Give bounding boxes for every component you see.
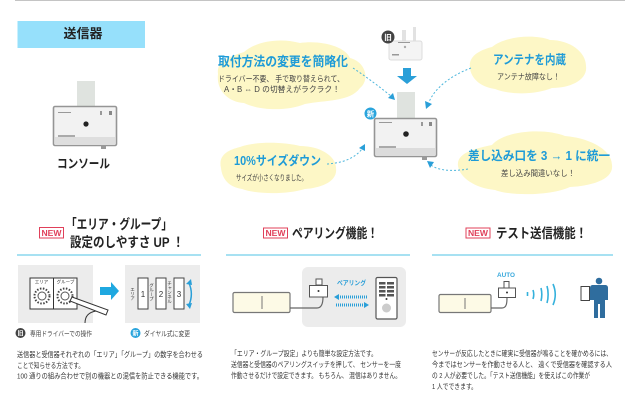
- console product photo: [54, 81, 116, 149]
- section: area group settings: [16, 216, 203, 380]
- description: の 2 人が必要でした。「テスト送信機能」を使えばこの作業が: [432, 371, 590, 380]
- section: test transmission: [432, 225, 613, 391]
- legend: old method: 旧: [17, 330, 24, 338]
- callout: 取付方法の変更を簡略化: A・B ⇔ D の切替えがラクラク！: [224, 84, 340, 94]
- arrow: connector callout to device: [427, 161, 468, 170]
- illustration: new dial: チャンネル: [167, 281, 172, 304]
- illustration: old driver dial: [18, 265, 108, 323]
- callout: 10%サイズダウン: 10%サイズダウン: [234, 153, 321, 168]
- description: 今まではセンサーを作動させる人と、 遠くで受信器を確認する人: [432, 360, 612, 369]
- arrow: change: [100, 282, 119, 300]
- illustration: new dial: 1: [141, 290, 146, 299]
- new badge: NEW: [42, 228, 62, 238]
- new transmitter photo: [364, 92, 436, 160]
- callout: アンテナを内蔵: [470, 37, 586, 93]
- illustration: new dial: [125, 265, 200, 323]
- section heading: テスト送信機能！: [496, 225, 587, 241]
- callout: 取付方法の変更を簡略化: 取付方法の変更を簡略化: [218, 54, 348, 69]
- callout: アンテナを内蔵: アンテナ故障なし！: [497, 72, 560, 82]
- legend: new method: [130, 328, 190, 338]
- description: [231, 349, 401, 380]
- callout: アンテナを内蔵: アンテナを内蔵: [493, 52, 566, 67]
- new badge: NEW: [266, 228, 286, 238]
- illustration: new dial: 2: [159, 290, 164, 299]
- description: [17, 350, 203, 380]
- heading: 送信器: [18, 21, 145, 48]
- description: 作動させるだけで設定できます。 もちろん、 混信はありません。: [231, 371, 401, 380]
- illustration: new dial: エリア: [130, 287, 136, 301]
- callout: 取付方法の変更を簡略化: ドライバー不要、 手で取り替えられて、: [218, 74, 344, 84]
- section: pairing: [226, 225, 410, 380]
- arrow: antenna callout to device: [425, 68, 471, 109]
- legend: new method: 新: [132, 330, 139, 338]
- description: 送信器と受信器それぞれの「エリア」「グループ」の数字を合わせる: [17, 350, 203, 359]
- illustration: test send: AUTO: [497, 273, 515, 279]
- section heading: [66, 216, 184, 250]
- callout: 差し込み口を 3 → 1 に統一: [458, 131, 612, 194]
- callout: 10%サイズダウン: サイズが小さくなりました。: [236, 172, 307, 182]
- description: 「エリア・グループ設定」よりも簡単な設定方法です。: [231, 349, 377, 358]
- new badge: NEW: [468, 228, 489, 238]
- legend: new method: ダイヤル式に変更: [144, 329, 190, 338]
- section heading: ペアリング機能！: [292, 225, 378, 241]
- label: コンソール: コンソール: [57, 157, 110, 171]
- description: 1 人でできます。: [432, 382, 477, 391]
- old transmitter photo: 旧: [384, 32, 392, 42]
- arrow: size callout to device: [327, 144, 365, 164]
- heading: 送信器: 送信器: [63, 26, 103, 41]
- illustration: new dial: グループ: [149, 282, 154, 301]
- legend: old method: 専用ドライバーでの操作: [30, 329, 92, 338]
- illustration: pairing: [233, 267, 406, 327]
- callout: 差し込み口を 3 → 1 に統一: 差し込み口を 3 → 1 に統一: [468, 148, 610, 163]
- new transmitter photo: 新: [367, 108, 375, 118]
- callout: 差し込み口を 3 → 1 に統一: 差し込み間違いなし！: [501, 168, 575, 178]
- description: ことで知らせる方法です。: [17, 361, 84, 370]
- callout: 取付方法の変更を簡略化: [218, 40, 365, 109]
- description: 100 通りの組み合わせで別の機器との混信を防止できる機能です。: [17, 372, 203, 380]
- illustration: old driver dial: エリア: [35, 280, 49, 286]
- arrow: mounting callout to device: [353, 68, 395, 100]
- illustration: test send: [439, 273, 608, 318]
- section heading: 設定のしやすさ UP ！: [70, 235, 184, 250]
- old transmitter photo: [382, 27, 422, 60]
- arrow: old to new: [397, 68, 417, 84]
- legend: old method: [16, 328, 92, 338]
- description: 送信器と受信器のペアリングスイッチを押して、 センサーを一度: [231, 360, 401, 369]
- illustration: old driver dial: グループ: [57, 278, 75, 286]
- section heading: 「エリア・グループ」: [66, 216, 172, 232]
- description: [432, 349, 612, 391]
- illustration: pairing: ペアリング: [337, 278, 366, 287]
- callout: 10%サイズダウン: [220, 143, 336, 193]
- illustration: new dial: 3: [177, 290, 182, 299]
